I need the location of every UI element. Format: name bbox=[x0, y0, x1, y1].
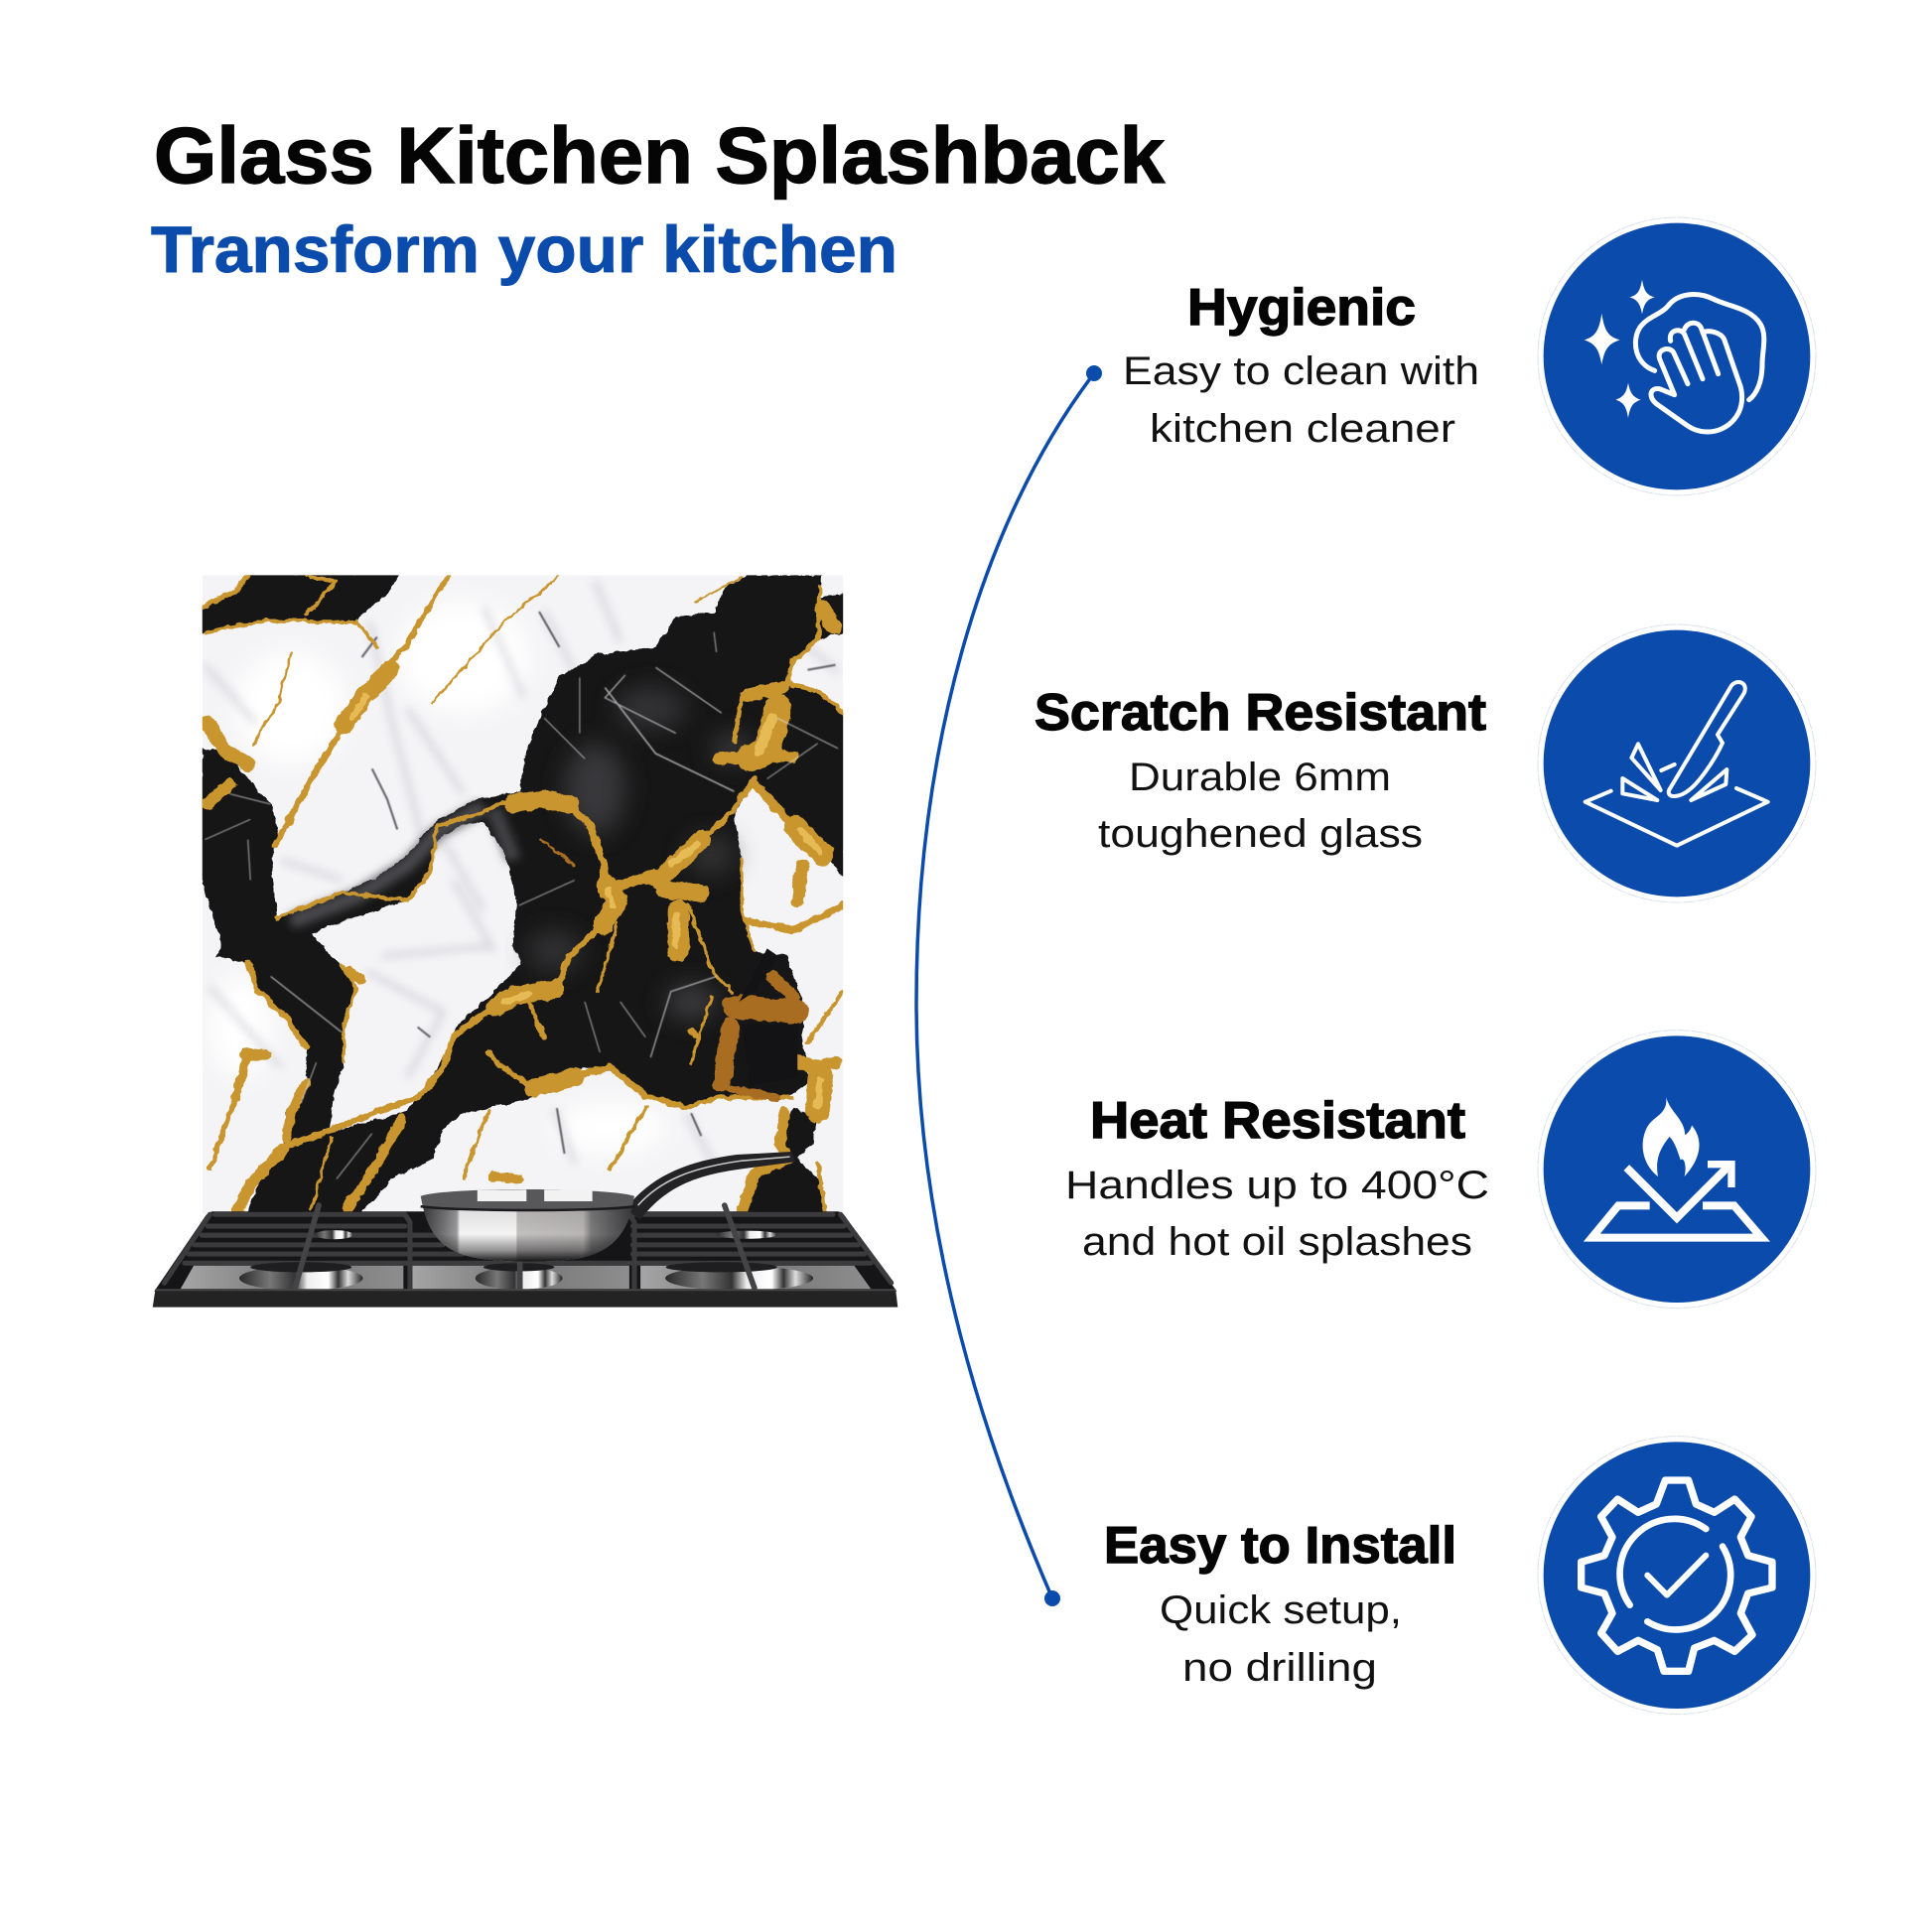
feature: hygienic text bbox=[1123, 279, 1479, 451]
icon: hand wiping with sparkles bbox=[1538, 217, 1816, 495]
description: Scratch Resistant bbox=[1098, 756, 1423, 856]
description: Hygienic: Easy to clean with bbox=[1123, 349, 1479, 393]
description: Scratch Resistant: toughened glass bbox=[1098, 812, 1423, 856]
feature: easy to install text bbox=[1104, 1517, 1456, 1690]
black marble veins bbox=[200, 574, 846, 1217]
gold veins bbox=[203, 576, 843, 1212]
description: Easy to Install: no drilling bbox=[1182, 1646, 1377, 1690]
feature: heat resistant text bbox=[1065, 1092, 1489, 1264]
pan bowl bbox=[422, 1200, 633, 1262]
translucent grey band and clouds bbox=[291, 807, 514, 921]
connector dot bottom bbox=[1044, 1590, 1060, 1606]
gas hob bbox=[153, 1205, 897, 1308]
connector curve bbox=[916, 365, 1102, 1606]
hob tray bbox=[154, 1211, 897, 1292]
description: Hygienic: kitchen cleaner bbox=[1150, 407, 1455, 451]
description: Easy to Install bbox=[1160, 1588, 1402, 1690]
pan handle bbox=[625, 1152, 795, 1219]
description: Heat Resistant: Handles up to 400°C bbox=[1065, 1164, 1489, 1207]
connector dot top bbox=[1086, 365, 1102, 381]
description: Heat Resistant: and hot oil splashes bbox=[1082, 1220, 1472, 1264]
subtitle: Transform your kitchen bbox=[151, 212, 897, 286]
description: Heat Resistant bbox=[1065, 1164, 1489, 1264]
heading: Hygienic: Hygienic bbox=[1187, 279, 1416, 337]
grate bars bbox=[165, 1214, 892, 1289]
description: Scratch Resistant: Durable 6mm bbox=[1129, 756, 1391, 799]
feature: scratch resistant text bbox=[1035, 684, 1486, 856]
white cracks in black marble bbox=[205, 632, 838, 1179]
description: Hygienic bbox=[1123, 349, 1479, 451]
hob glass panels bbox=[181, 1266, 871, 1289]
pan rim bbox=[421, 1189, 634, 1209]
product image: marble splashback above gas hob bbox=[153, 574, 897, 1308]
heading: Easy to Install: Easy to Install bbox=[1104, 1517, 1456, 1575]
heading: Scratch Resistant: Scratch Resistant bbox=[1035, 684, 1486, 742]
icon: knife on glass bbox=[1538, 624, 1816, 902]
dark insets on gold bbox=[740, 948, 778, 1002]
front edge bbox=[153, 1291, 897, 1308]
icon: gear with check bbox=[1538, 1437, 1816, 1715]
icon: flame over glass bbox=[1538, 1031, 1816, 1309]
frying pan bbox=[421, 1152, 795, 1262]
burners bbox=[239, 1230, 813, 1291]
description: Easy to Install: Quick setup, bbox=[1160, 1588, 1402, 1632]
heading: Heat Resistant: Heat Resistant bbox=[1090, 1092, 1465, 1150]
cross bars bbox=[295, 1205, 755, 1291]
marble panel bbox=[200, 574, 846, 1217]
title: Glass Kitchen Splashback bbox=[154, 111, 1166, 200]
